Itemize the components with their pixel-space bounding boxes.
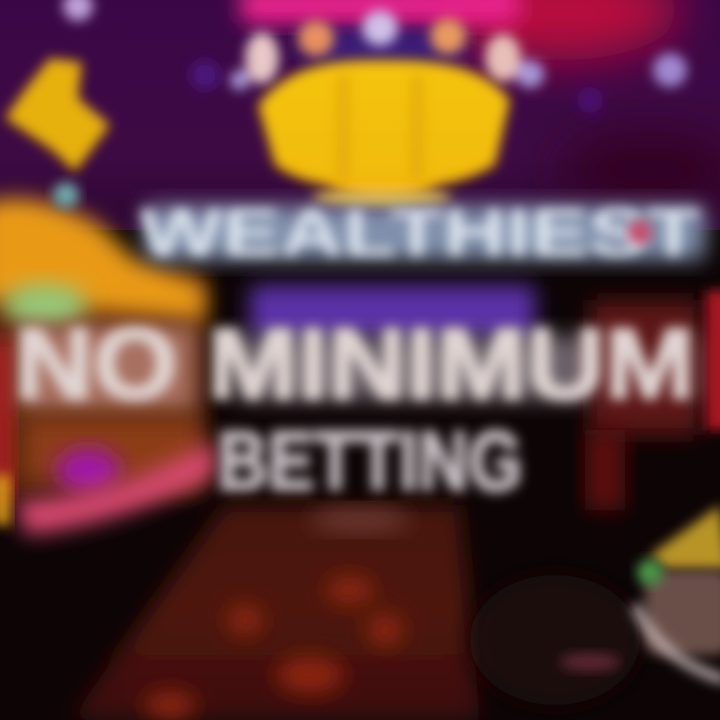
machine panel	[20, 325, 195, 410]
haze behind no minimum	[235, 335, 705, 400]
teal gem	[53, 182, 79, 208]
machine lower orange	[25, 420, 200, 480]
left red edge	[0, 340, 12, 500]
green and pink reel	[3, 283, 87, 327]
icon: lightning bolt	[5, 58, 110, 172]
background: purple night sky	[0, 0, 720, 230]
purple gem	[56, 448, 120, 492]
glow: red top right	[440, 0, 680, 60]
heading: no minimum: NO MINIMUM	[15, 308, 695, 420]
sparkles	[63, 0, 687, 113]
dark stool	[470, 575, 640, 705]
machine body	[645, 570, 720, 655]
glow: maroon right side	[560, 130, 720, 210]
banner: purple panel	[250, 285, 535, 340]
pink base	[15, 440, 215, 535]
crown shading	[338, 75, 422, 180]
right machine lower	[585, 430, 625, 510]
yellow edge	[0, 475, 10, 525]
carpet pattern	[144, 576, 403, 719]
gold top	[650, 505, 720, 570]
crown blue inner	[300, 32, 465, 60]
machine body	[0, 270, 205, 495]
heading: top line: WEALTHIEST	[140, 195, 700, 269]
slot machine left	[0, 182, 215, 535]
pale strip for heading	[145, 205, 705, 260]
crown top band	[240, 0, 520, 24]
icon: crown	[230, 0, 544, 208]
carpet floor	[70, 505, 480, 720]
crown jewels	[230, 10, 544, 90]
white rim	[635, 605, 720, 680]
crown body	[258, 60, 510, 200]
background: lower dark room	[0, 230, 720, 720]
pink accent	[628, 220, 652, 244]
slot machine right	[470, 505, 720, 705]
heading: betting: BETTING	[218, 414, 522, 508]
right machine backdrop	[590, 300, 700, 435]
green gem	[637, 559, 663, 585]
machine top	[0, 198, 205, 320]
red strip right	[706, 290, 720, 430]
light spot on carpet	[310, 508, 410, 532]
crown base	[312, 188, 452, 208]
pink stool highlight	[560, 653, 620, 671]
